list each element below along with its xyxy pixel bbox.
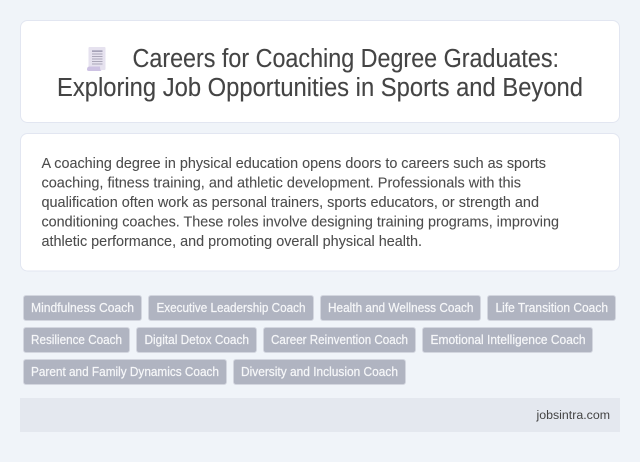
icon: paper scroll bbox=[87, 47, 106, 71]
title text: Careers for Coaching Degree Graduates: bbox=[132, 45, 559, 73]
tag list: coaching careers bbox=[24, 296, 616, 384]
tag: Career Reinvention Coach bbox=[264, 328, 416, 352]
description text: athletic performance, and promoting overall physical health. bbox=[42, 234, 422, 250]
tag: Life Transition Coach: Life Transition Coach bbox=[496, 301, 608, 315]
tag: Emotional Intelligence Coach bbox=[422, 328, 592, 352]
tag: Parent and Family Dynamics Coach bbox=[24, 360, 226, 384]
tag: Career Reinvention Coach: Career Reinvention Coach bbox=[271, 333, 408, 347]
tag: Digital Detox Coach bbox=[136, 328, 256, 352]
tag: Health and Wellness Coach bbox=[320, 296, 480, 320]
tag: Health and Wellness Coach: Health and Wellness Coach bbox=[328, 301, 474, 315]
tag: Mindfulness Coach bbox=[24, 296, 142, 320]
description text bbox=[42, 156, 559, 250]
tag: Parent and Family Dynamics Coach: Parent and Family Dynamics Coach bbox=[31, 365, 219, 379]
panel: title card bbox=[20, 20, 620, 122]
tag: Executive Leadership Coach bbox=[148, 296, 314, 320]
tag: Diversity and Inclusion Coach: Diversity and Inclusion Coach bbox=[241, 365, 398, 379]
description text: conditioning coaches. These roles involve designing training programs, improving bbox=[42, 214, 559, 230]
description text: A coaching degree in physical education opens doors to careers such as sports bbox=[42, 156, 546, 172]
tag: Life Transition Coach bbox=[488, 296, 616, 320]
title text bbox=[57, 45, 583, 102]
tag: Resilience Coach: Resilience Coach bbox=[31, 333, 122, 347]
title text: Exploring Job Opportunities in Sports and Beyond bbox=[57, 74, 583, 102]
panel: description card bbox=[20, 134, 620, 271]
description text: qualification often work as personal trainers, sports educators, or strength and bbox=[42, 195, 539, 211]
footer bar bbox=[20, 398, 620, 432]
tag: Emotional Intelligence Coach: Emotional Intelligence Coach bbox=[430, 333, 586, 347]
tag: Resilience Coach bbox=[24, 328, 130, 352]
footer text: source: jobsintra.com bbox=[536, 408, 610, 422]
tag: Diversity and Inclusion Coach bbox=[234, 360, 406, 384]
tag: Mindfulness Coach: Mindfulness Coach bbox=[31, 301, 134, 315]
description text: coaching, fitness training, and athletic development. Professionals with this bbox=[42, 176, 521, 192]
tag: Executive Leadership Coach: Executive Leadership Coach bbox=[156, 301, 306, 315]
tag: Digital Detox Coach: Digital Detox Coach bbox=[144, 333, 249, 347]
